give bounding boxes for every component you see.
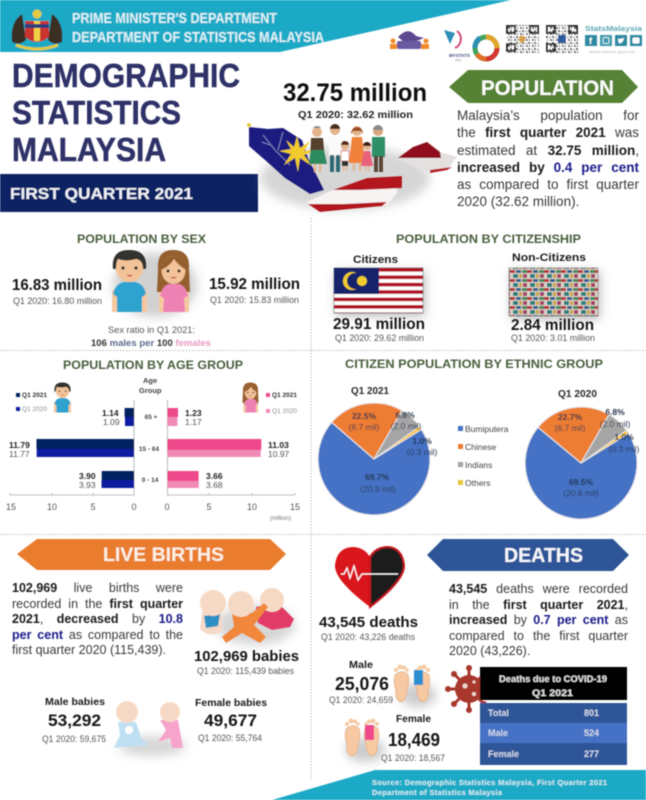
pie chart: Q1 2020: 1.0% (614, 432, 634, 442)
male values: 3.90 (79, 471, 96, 481)
pie chart: Q1 2021: 1.0% (412, 436, 432, 446)
male values (9, 408, 120, 490)
icon: mystats logo (444, 30, 470, 62)
legend: female: Q1 2021 (272, 393, 298, 399)
male values: 1.09 (103, 417, 120, 427)
panel: population by citizenship: POPULATION BY CITIZENSHIP (396, 232, 581, 246)
icon: world flags (509, 268, 600, 319)
pie chart: Q1 2021: (2.0 mil) (391, 421, 422, 431)
male figure: 16.83 million (12, 277, 102, 294)
pie chart: Q1 2021: Q1 2021 (351, 386, 389, 397)
axis title: age group: Group (139, 386, 162, 395)
female babies: Female babies (195, 698, 267, 709)
footer source band (272, 770, 646, 800)
icon: heart with pulse (335, 547, 404, 607)
icon: three babies (200, 588, 295, 645)
logos row (390, 25, 642, 62)
StatsMalaysia social block: f (589, 36, 593, 46)
map: Sarawak (307, 176, 402, 212)
icon: male and female babies (114, 701, 186, 756)
mother (349, 126, 365, 171)
population text: Malaysia’s population for (457, 108, 639, 123)
icon: virus (445, 665, 489, 713)
header text: PRIME MINISTER'S DEPARTMENT (72, 10, 277, 27)
pie chart: Q1 2021: (0.3 mil) (407, 447, 438, 457)
female figure (209, 276, 300, 305)
deaths total: Q1 2020: 43,226 deaths (321, 632, 415, 642)
axis title: age group: Age (143, 376, 157, 385)
male bars (36, 408, 134, 488)
legend: ethnic groups: Indians (465, 460, 492, 470)
banner: live births (17, 539, 286, 570)
table: COVID-19 deaths: 524 (584, 728, 599, 738)
live births text: 2021, decreased by 10.8 (12, 612, 183, 626)
pie chart: Q1 2021: 69.7% (365, 472, 389, 482)
title: STATISTICS (12, 94, 181, 131)
StatsMalaysia social block (585, 26, 642, 54)
table: COVID-19 deaths: 277 (584, 749, 599, 759)
panel: citizen population by ethnic group (318, 357, 640, 519)
icon: mystats logo: 2021 (455, 58, 462, 62)
panel: live births (12, 539, 299, 756)
female values (185, 408, 290, 490)
sex ratio (91, 325, 211, 349)
legend: ethnic groups: Chinese (465, 442, 496, 452)
age category labels (139, 414, 159, 484)
legend: male: Q1 2020 (22, 407, 48, 413)
age category labels: 15 - 64 (139, 446, 159, 453)
non-citizens: Non-Citizens (512, 252, 586, 264)
legend: ethnic groups (458, 424, 509, 488)
axis unit: (million) (270, 516, 291, 522)
girl (361, 142, 373, 171)
male babies: Male babies (45, 697, 105, 708)
banner: deaths: DEATHS (504, 545, 583, 567)
table: COVID-19 deaths: Total (488, 708, 509, 718)
pie chart: Q1 2020: Q1 2020 (558, 389, 597, 400)
sex ratio: Sex ratio in Q1 2021: (108, 325, 195, 336)
total population figure: 32.75 million (283, 79, 427, 107)
map: Sabah (398, 142, 457, 173)
pie chart: Q1 2021: (20.9 mil) (360, 484, 396, 494)
citizens (333, 254, 425, 343)
male figure (12, 277, 102, 306)
axis tick labels: 10 (47, 502, 57, 512)
pie chart: Q1 2020 (525, 389, 640, 519)
pie chart: Q1 2021 (318, 386, 438, 515)
axis tick labels: 15 (6, 502, 16, 512)
pie chart: Q1 2020: 22.7% (558, 412, 582, 422)
male babies (42, 697, 106, 744)
female figure: 15.92 million (209, 276, 300, 293)
panel: population by age group: POPULATION BY AGE GROUP (63, 358, 243, 372)
table: COVID-19 deaths: Deaths due to COVID-19 (499, 674, 607, 685)
births total (194, 648, 299, 676)
icon: QR code 1 (506, 25, 539, 53)
total population figure: Q1 2020: 32.62 million (298, 109, 413, 121)
axis tick labels: 10 (247, 502, 257, 512)
icon: boy small (54, 382, 71, 413)
panel: population by sex: POPULATION BY SEX (77, 232, 206, 246)
axes (10, 400, 295, 495)
map of Malaysia with family (247, 123, 457, 212)
table: COVID-19 deaths: 801 (584, 708, 599, 718)
female values: 10.97 (268, 449, 290, 459)
births total: 102,969 babies (194, 648, 299, 665)
male deaths: Male (349, 660, 373, 671)
female deaths: Female (396, 714, 431, 725)
panel: population by sex (12, 232, 300, 349)
panel: citizen population by ethnic group: CITIZEN POPULATION BY ETHNIC GROUP (345, 357, 603, 371)
live births text (12, 581, 183, 661)
female deaths: Q1 2020: 18,567 (381, 753, 445, 763)
icon: boy and girl (112, 250, 197, 317)
citizens: 29.91 million (333, 316, 425, 333)
banner: live births: LIVE BIRTHS (103, 545, 224, 566)
female babies (195, 698, 267, 743)
header banner (0, 0, 511, 52)
header text: DEPARTMENT OF STATISTICS MALAYSIA (72, 29, 324, 46)
icon: female feet with tag (345, 719, 385, 762)
deaths text: in the first quarter 2021, (449, 598, 628, 612)
axis title: age group (139, 376, 162, 395)
population text: increased by 0.4 per cent (457, 160, 639, 175)
population text (457, 107, 639, 213)
axis tick labels (6, 502, 300, 512)
icon: coat of arms (12, 10, 62, 49)
pie chart: Q1 2020: (0.3 mil) (609, 444, 640, 454)
female figure: Q1 2020: 15.83 million (210, 295, 299, 305)
legend: ethnic groups: Bumiputera (465, 424, 509, 434)
non-citizens: Q1 2020: 3.01 million (511, 333, 595, 343)
deaths text (449, 582, 628, 662)
female deaths: 18,469 (388, 730, 440, 750)
female values: 1.17 (185, 417, 202, 427)
title: MALAYSIA (12, 131, 166, 168)
axis tick labels: 0 (164, 502, 170, 512)
panel: population by age group (6, 358, 300, 522)
pie chart: Q1 2020: (2.0 mil) (600, 419, 631, 429)
banner: deaths (427, 539, 629, 571)
icon: mystats logo: MYSTATS (449, 53, 470, 58)
title (12, 57, 240, 168)
legend: male: Q1 2021 (22, 393, 48, 399)
female bars (168, 408, 261, 488)
pie chart: Q1 2021: (6.7 mil) (349, 422, 380, 432)
citizens: Q1 2020: 29.62 million (335, 333, 424, 343)
map: peninsula (247, 123, 324, 194)
grandmother (309, 126, 327, 172)
female babies: 49,677 (204, 711, 257, 730)
title: DEMOGRAPHIC (12, 57, 240, 94)
deaths text: 43,545 deaths were recorded (449, 582, 628, 596)
male values: 11.77 (9, 449, 30, 459)
table: COVID-19 deaths: Female (488, 749, 519, 759)
population text: estimated at 32.75 million, (457, 143, 639, 158)
footer source band: Department of Statistics Malaysia (372, 788, 503, 797)
legend: ethnic groups: Others (465, 478, 491, 488)
StatsMalaysia social block: StatsMalaysia (585, 26, 642, 33)
male values: 1.14 (102, 408, 119, 418)
banner: population: POPULATION (481, 77, 614, 100)
age category labels: 65 + (145, 414, 158, 421)
subtitle banner (0, 174, 258, 212)
dividers (0, 218, 646, 780)
panel: deaths (319, 539, 629, 765)
age category labels: 0 - 14 (142, 477, 159, 484)
male figure: Q1 2020: 16.80 million (13, 296, 102, 306)
male deaths: 25,076 (335, 674, 389, 694)
boy (341, 141, 349, 171)
population text: the first quarter 2021 was (457, 125, 639, 140)
deaths text: compared to the first quarter (449, 628, 628, 642)
citizens: Citizens (353, 254, 398, 266)
table: COVID-19 deaths (480, 667, 627, 765)
grandfather (372, 125, 385, 172)
panel: population (449, 70, 639, 213)
icon: girl small (242, 382, 259, 413)
header text (72, 10, 324, 46)
non-citizens: 2.84 million (511, 317, 594, 334)
male deaths: Q1 2020: 24,659 (329, 695, 393, 705)
deaths text: increased by 0.7 per cent as (449, 613, 628, 627)
sex ratio: 106 males per 100 females (91, 338, 211, 349)
deaths total (319, 614, 418, 642)
table: COVID-19 deaths: Q1 2021 (532, 688, 574, 699)
icon: census logo (390, 31, 429, 49)
icon: male feet with tag (394, 665, 436, 707)
live births text: per cent as compared to the (12, 628, 183, 642)
live births text: first quarter 2020 (115,439). (12, 643, 166, 657)
legend: female (266, 393, 298, 415)
axis tick labels: 5 (90, 502, 96, 512)
pie chart: Q1 2021: 22.5% (352, 411, 376, 421)
icon: QR code 2 (546, 25, 578, 53)
pie chart: Q1 2020: (20.6 mil) (563, 488, 599, 498)
subtitle banner: FIRST QUARTER 2021 (10, 186, 193, 203)
panel: population by citizenship (333, 232, 600, 343)
female values: 3.68 (206, 480, 223, 490)
icon: Malaysian flag (334, 268, 425, 316)
non-citizens (509, 252, 600, 343)
pie chart: Q1 2020: (6.7 mil) (555, 423, 586, 433)
male values: 11.79 (9, 440, 30, 450)
icon: family (309, 124, 385, 172)
StatsMalaysia social block: www.dosm.gov.my (589, 49, 635, 54)
icon: SDG wheel (475, 37, 497, 59)
deaths total: 43,545 deaths (319, 614, 418, 631)
male values: 3.93 (79, 480, 96, 490)
population text: as compared to first quarter (457, 177, 639, 192)
female values: 11.03 (268, 440, 289, 450)
population text: 2020 (32.62 million). (457, 194, 579, 209)
legend: female: Q1 2020 (272, 409, 298, 415)
deaths text: 2020 (43,226). (449, 644, 530, 658)
table: COVID-19 deaths: Male (488, 728, 508, 738)
live births text: recorded in the first quarter (12, 596, 183, 610)
pie chart: Q1 2021: 6.8% (395, 410, 415, 420)
axis tick labels: 0 (131, 502, 137, 512)
axis tick labels: 5 (206, 502, 212, 512)
legend: male (16, 393, 48, 413)
axis tick labels: 15 (290, 502, 300, 512)
total population figure (283, 79, 427, 121)
female babies: Q1 2020: 55,764 (198, 733, 262, 743)
pie chart: Q1 2020: 6.8% (605, 407, 625, 417)
births total: Q1 2020: 115,439 babies (197, 666, 294, 676)
female values: 1.23 (185, 408, 202, 418)
female deaths (381, 714, 445, 763)
male babies: Q1 2020: 59,675 (42, 734, 106, 744)
male deaths (329, 660, 393, 705)
pie chart: Q1 2020: 69.5% (569, 477, 593, 487)
male babies: 53,292 (48, 711, 101, 730)
female values: 3.66 (206, 471, 223, 481)
live births text: 102,969 live births were (12, 581, 183, 595)
father (329, 124, 341, 172)
banner: population (449, 70, 638, 103)
footer source band: Source: Demographic Statistics Malaysia, First Quarter 2021 (372, 778, 607, 787)
